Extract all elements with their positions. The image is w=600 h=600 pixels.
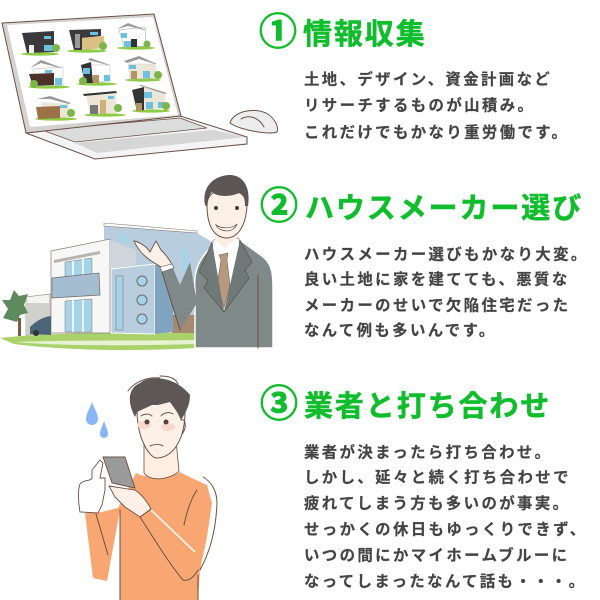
text block 1: リサーチするものが山積み。: [304, 96, 535, 114]
illustration: businessman in suit: [134, 175, 273, 348]
text block 3: 業者が決まったら打ち合わせ。: [304, 442, 552, 462]
heading: 3 業者と打ち合わせ: ③: [260, 384, 298, 426]
heading: 3 業者と打ち合わせ: [260, 384, 551, 426]
text block 1: [304, 70, 569, 142]
text block 2: メーカーのせいで欠陥住宅だった: [304, 296, 570, 314]
heading: 1 情報収集: ①: [259, 12, 297, 54]
text block 2: なんて例も多いんです。: [304, 322, 497, 340]
text block 3: せっかくの休日もゆっくりできず、: [304, 520, 588, 538]
text block 3: 疲れてしまう方も多いのが事実。: [304, 494, 570, 512]
text block 3: [304, 442, 588, 590]
heading: 2 ハウスメーカー選び: ②: [260, 186, 298, 228]
text block 2: ハウスメーカー選びもかなり大変。: [304, 244, 589, 264]
illustration: worried man with smartphone: [78, 376, 217, 600]
upper windows: [65, 258, 92, 278]
heading: 1 情報収集: 情報収集: [303, 18, 427, 51]
text block 2: [304, 244, 589, 340]
text block 3: しかし、延々と続く打ち合わせで: [304, 468, 571, 486]
text block 3: いつの間にかマイホームブルーに: [304, 546, 569, 564]
illustration: modern house with lawn: [0, 223, 212, 350]
heading: 3 業者と打ち合わせ: 業者と打ち合わせ: [304, 390, 551, 423]
text block 3: なってしまったなんて話も・・・。: [304, 572, 586, 590]
heading: 2 ハウスメーカー選び: ハウスメーカー選び: [305, 192, 583, 225]
lower windows: [65, 299, 92, 332]
text block 1: 土地、デザイン、資金計画など: [304, 70, 552, 88]
icon: sweat drops: [86, 402, 108, 438]
text block 1: これだけでもかなり重労働です。: [304, 124, 569, 142]
heading: 1 情報収集: [259, 12, 427, 54]
house grid on screen: [21, 23, 170, 121]
heading: 2 ハウスメーカー選び: [260, 186, 583, 228]
icon: computer mouse: [230, 110, 278, 133]
text block 2: 良い土地に家を建てても、悪質な: [304, 270, 570, 288]
icon: laptop showing houses: [2, 14, 247, 159]
